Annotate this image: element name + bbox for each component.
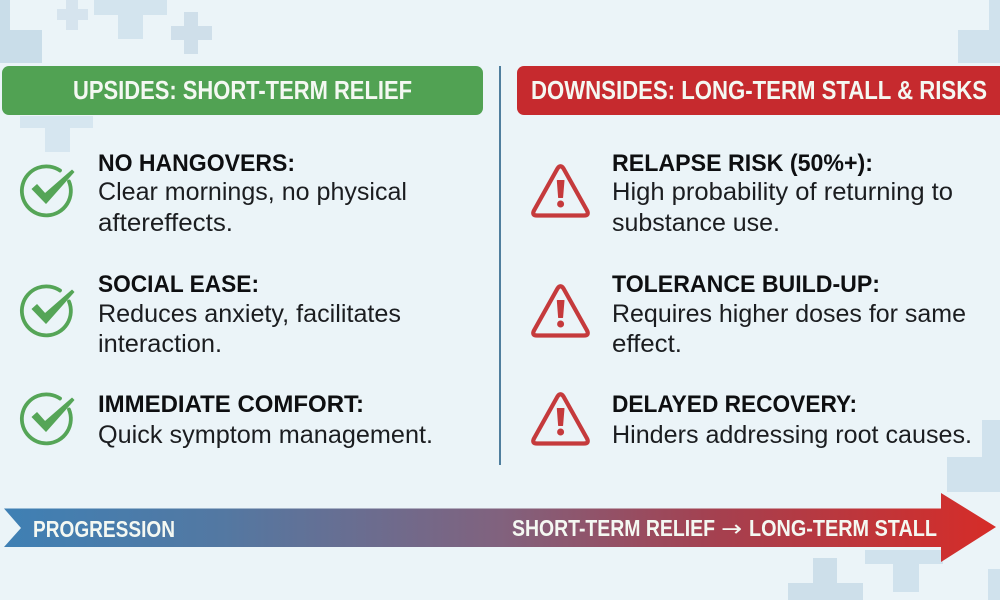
panel: upsides (2, 66, 483, 449)
arrow label: short-term to long-term: → (721, 517, 742, 542)
item: relapse risk: High probability of returning to (612, 178, 953, 206)
item: no hangovers: NO HANGOVERS: (98, 150, 295, 177)
item: relapse risk: substance use. (612, 209, 780, 237)
item: immediate comfort (22, 391, 433, 449)
item: delayed recovery: Hinders addressing root causes. (612, 421, 972, 449)
item: relapse risk (533, 150, 953, 237)
heading banner: upsides (2, 66, 483, 115)
item: social ease: interaction. (98, 330, 222, 358)
heading banner: downsides (517, 66, 1000, 115)
item: relapse risk: RELAPSE RISK (50%+): (612, 150, 873, 177)
arrow label: progression: PROGRESSION (33, 516, 175, 542)
item: social ease (22, 271, 401, 358)
divider (499, 66, 501, 465)
item: no hangovers: Clear mornings, no physical (98, 178, 407, 206)
item: tolerance build-up: Requires higher doses for same (612, 300, 966, 328)
arrow label: short-term to long-term: LONG-TERM STALL (749, 515, 937, 541)
item: social ease: SOCIAL EASE: (98, 271, 259, 298)
heading banner: upsides: UPSIDES: SHORT-TERM RELIEF (73, 75, 412, 105)
item: delayed recovery: DELAYED RECOVERY: (612, 391, 857, 418)
item: delayed recovery (533, 391, 972, 449)
item: tolerance build-up (533, 271, 966, 358)
item: tolerance build-up: effect. (612, 330, 682, 358)
item: immediate comfort: IMMEDIATE COMFORT: (98, 391, 364, 418)
item: immediate comfort: Quick symptom management. (98, 421, 433, 449)
panel: downsides (517, 66, 1000, 449)
item: tolerance build-up: TOLERANCE BUILD-UP: (612, 271, 880, 298)
progression arrow (4, 493, 996, 562)
item: no hangovers: aftereffects. (98, 209, 233, 237)
item: no hangovers (22, 150, 407, 237)
arrow label: short-term to long-term (512, 515, 937, 542)
item: social ease: Reduces anxiety, facilitates (98, 300, 401, 328)
arrow label: short-term to long-term: SHORT-TERM RELIEF (512, 515, 715, 541)
